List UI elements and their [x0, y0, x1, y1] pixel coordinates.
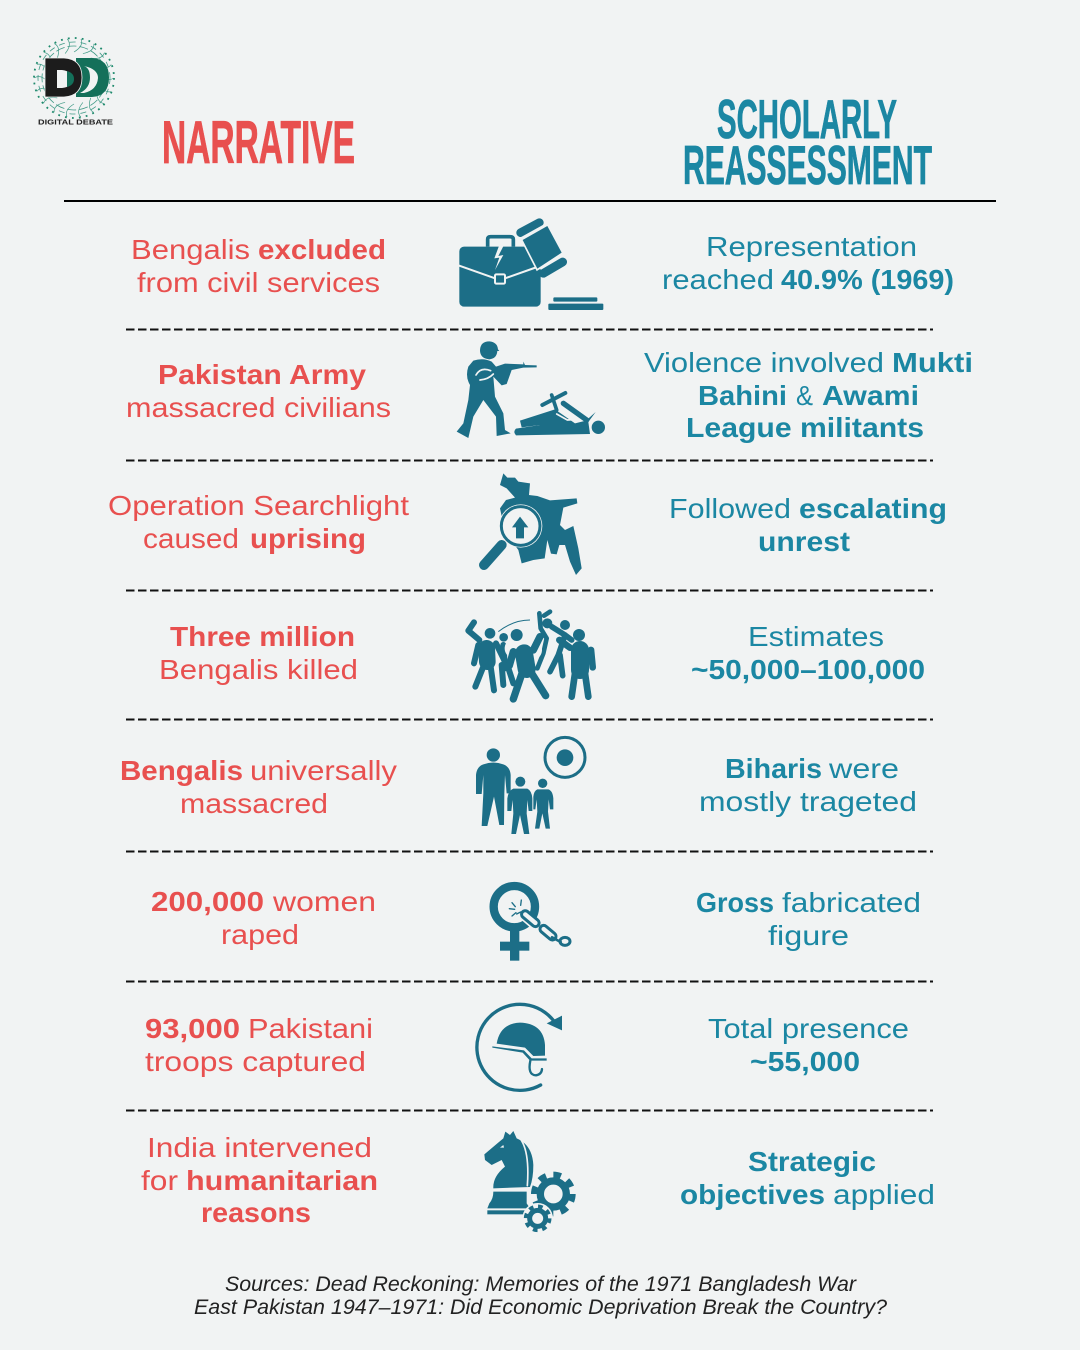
narrative: civil services: from civil services: [137, 267, 380, 298]
narrative: three million: Bengalis killed: [159, 654, 358, 685]
reassessment: strategic objectives: Strategic: [748, 1146, 876, 1177]
reassessment: violence: &: [796, 380, 813, 411]
reassessment: fabricated: figure: [768, 920, 849, 951]
reassessment: fabricated: Gross: [696, 887, 774, 918]
narrative: army: [126, 359, 391, 423]
reassessment: fabricated: fabricated: [782, 887, 921, 918]
row 3: [108, 473, 947, 575]
reassessment: escalating unrest: unrest: [758, 526, 850, 557]
narrative: humanitarian: [141, 1132, 378, 1228]
icon: crowd: [468, 612, 593, 699]
narrative: searchlight: Operation Searchlight: [108, 490, 409, 521]
narrative: civil services: Bengalis: [131, 234, 250, 265]
reassessment: violence: Violence involved: [644, 347, 884, 378]
icon: briefcase and gavel: [459, 223, 603, 310]
reassessment: estimates: Estimates: [748, 621, 884, 652]
reassessment: representation: 40.9% (1969): [781, 264, 954, 295]
narrative: civil services: excluded: [258, 234, 386, 265]
icon: chess knight and gears: [484, 1131, 577, 1234]
reassessment: violence: [644, 347, 973, 443]
reassessment: presence: [708, 1013, 909, 1077]
narrative: troops: 93,000: [145, 1013, 240, 1044]
narrative: humanitarian: India intervened: [147, 1132, 372, 1163]
narrative: searchlight: [108, 490, 409, 554]
reassessment: representation: reached: [662, 264, 774, 295]
reassessment: estimates: ~50,000–100,000: [691, 654, 925, 685]
reassessment: representation: Representation: [706, 231, 917, 262]
reassessment: presence: ~55,000: [750, 1046, 860, 1077]
row 6: [151, 886, 921, 961]
narrative: searchlight: caused: [143, 523, 239, 554]
narrative: army: Pakistan Army: [158, 359, 367, 390]
reassessment: strategic objectives: applied: [833, 1179, 935, 1210]
reassessment: biharis: mostly trageted: [699, 786, 917, 817]
reassessment: escalating unrest: Followed: [669, 493, 791, 524]
reassessment: violence: Bahini: [698, 380, 787, 411]
sources: Sources: Dead Reckoning: Memories of the 1971 Bangladesh War: [225, 1273, 857, 1296]
reassessment: representation: [662, 231, 954, 295]
sources: [194, 1273, 887, 1319]
logo: Digital Debate: DIGITAL DEBATE: [38, 120, 113, 126]
heading: scholarly reassessment: SCHOLARLY: [717, 88, 897, 150]
reassessment: violence: League militants: [686, 412, 924, 443]
narrative: troops: Pakistani: [248, 1013, 373, 1044]
reassessment: escalating unrest: escalating: [799, 493, 947, 524]
row 2: [126, 341, 973, 443]
narrative: humanitarian: humanitarian: [186, 1165, 378, 1196]
reassessment: violence: Mukti: [892, 347, 973, 378]
narrative: three million: [159, 621, 358, 685]
narrative: universally massacred: universally: [250, 755, 397, 786]
row 4: [159, 612, 925, 699]
reassessment: biharis: were: [828, 753, 899, 784]
logo: Digital Debate: [34, 38, 114, 126]
reassessment: presence: Total presence: [708, 1013, 909, 1044]
reassessment: estimates: [691, 621, 925, 685]
narrative: universally massacred: massacred: [180, 788, 328, 819]
icon: family targeted: [476, 737, 585, 834]
sources: East Pakistan 1947–1971: Did Economic Deprivation Break the Country?: [194, 1296, 887, 1319]
reassessment: fabricated: [696, 887, 921, 951]
reassessment: biharis: Biharis: [725, 753, 822, 784]
narrative: universally massacred: [120, 755, 397, 819]
narrative: troops: troops captured: [145, 1046, 366, 1077]
row 1: [131, 223, 954, 310]
narrative: women raped: [151, 886, 376, 950]
narrative: humanitarian: for: [141, 1165, 178, 1196]
narrative: women raped: raped: [221, 919, 299, 950]
reassessment: strategic objectives: objectives: [680, 1179, 825, 1210]
row 8: [141, 1131, 935, 1234]
narrative: searchlight: uprising: [250, 523, 366, 554]
icon: soldier and fallen civilian: [457, 341, 605, 438]
icon: helmet with arrow: [477, 1004, 562, 1090]
row 5: [120, 737, 917, 834]
narrative: three million: Three million: [170, 621, 355, 652]
heading: scholarly reassessment: [683, 88, 932, 196]
narrative: civil services: [131, 234, 386, 298]
narrative: women raped: 200,000: [151, 886, 264, 917]
reassessment: escalating unrest: [669, 493, 947, 557]
narrative: army: massacred civilians: [126, 392, 391, 423]
narrative: women raped: women: [272, 886, 376, 917]
reassessment: violence: Awami: [822, 380, 919, 411]
narrative: universally massacred: Bengalis: [120, 755, 243, 786]
icon: map with magnifier: [484, 473, 582, 575]
narrative: humanitarian: reasons: [201, 1197, 311, 1228]
narrative: troops: [145, 1013, 373, 1077]
icon: broken chain on female symbol: [494, 886, 570, 961]
row 7: [145, 1004, 909, 1090]
reassessment: biharis: [699, 753, 917, 817]
heading: narrative: NARRATIVE: [162, 109, 355, 176]
reassessment: strategic objectives: [680, 1146, 935, 1210]
